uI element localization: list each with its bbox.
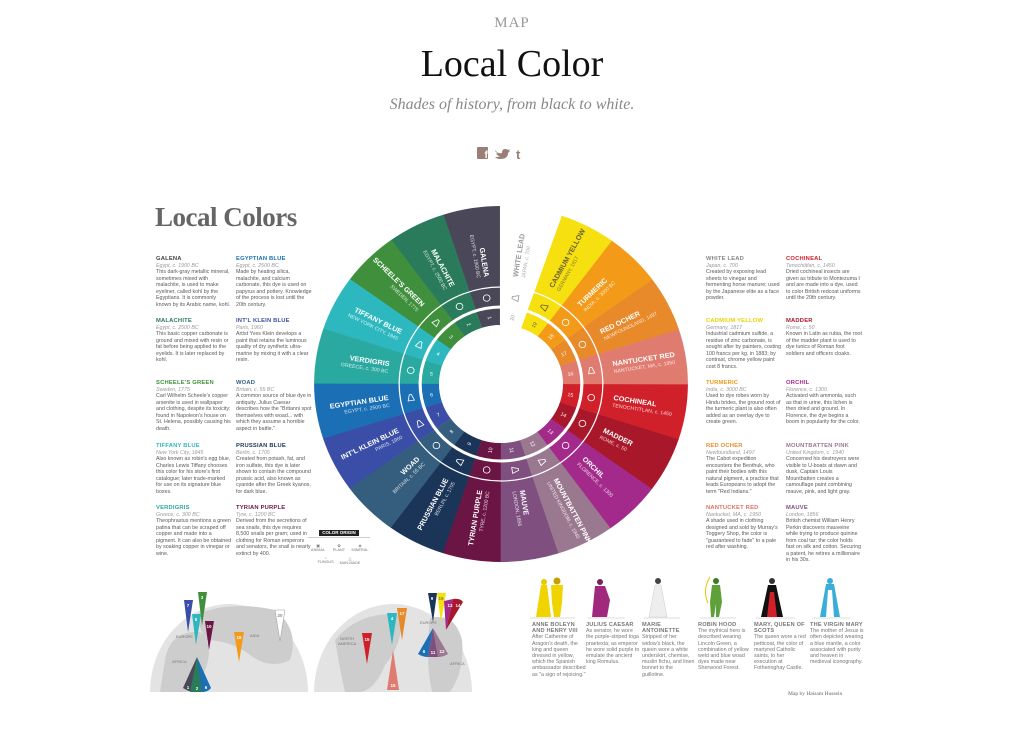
wheel segments	[327, 218, 675, 550]
segment labels: EGYPT, c. 1900 BC	[468, 234, 481, 279]
text column: right 1: Newfoundland, 1497	[706, 450, 755, 456]
text column: right 2: ORCHIL	[786, 380, 809, 386]
text column: left 1: Also known as robin's egg blue, Charles Lewis Tiffany chooses this color for his store's first catalogue; later trade-marked for use on its signature blue boxes.	[156, 456, 230, 494]
segment labels: NANTUCKET RED	[612, 351, 675, 368]
segment labels: JAPAN, c. 700	[521, 246, 532, 279]
segment labels: BERLIN, c. 1705	[434, 481, 457, 517]
segment labels: NEWFOUNDLAND, 1497	[603, 311, 659, 342]
text column: left 1: VERDIGRIS	[156, 505, 190, 511]
text column: right 2: British chemist William Henry Perkin discovers mauveine while trying to produce quinine from coal tar; the color holds fast on silk and cotton. Securing a patent, he retires a millionaire in his 30s.	[786, 518, 861, 563]
text column: left 1: Sweden, 1775	[156, 386, 190, 392]
text column: left 1: Egypt, c. 1900 BC	[156, 262, 199, 268]
segment labels: 5	[429, 371, 433, 378]
segment labels: EGYPT, c. 2500 BC	[421, 250, 448, 292]
segment labels: NANTUCKET, MA, c. 1950	[613, 360, 676, 375]
figure: mary queen of scots	[761, 578, 783, 617]
text column: left 2: A common source of blue dye in antiquity. Julius Caesar describes how the "Britanni spot themselves with woad... with which they assume a horrible aspect in battle."	[236, 393, 312, 432]
segment labels: PRUSSIAN BLUE	[416, 477, 451, 531]
text column: right 1: CADMIUM YELLOW	[706, 318, 763, 324]
figure: virgin mary	[820, 578, 840, 617]
segment labels: 11	[507, 447, 514, 453]
segment labels: 6	[430, 392, 434, 399]
segment labels: TYRIAN PURPLE	[467, 489, 484, 546]
text column: left 2: Derived from the secretions of sea snails, this dye requires 8,500 snails per gram; used in clothing for Roman emperors and senators, the snail is nearly extinct by 400.	[236, 518, 310, 556]
segment labels: MALACHITE	[429, 248, 456, 288]
text column: right 1: A shade used in clothing designed and sold by Murray's Toggery Shop, the color is "guaranteed to fade" to a pale red after washing.	[706, 518, 778, 550]
text column: right 1: TURMERIC	[706, 380, 738, 386]
text column: right 1: India, c. 3000 BC	[706, 386, 747, 392]
segment labels: CADMIUM YELLOW	[548, 227, 587, 289]
text column: right 2: Activated with ammonia, such as that in urine, this lichen is then dried and ground. In Florence, the dye begins a boom in popularity for the color.	[786, 393, 860, 425]
map: old world: 6	[205, 685, 208, 690]
text column: right 2: London, 1856	[786, 512, 818, 518]
segment labels: EGYPTIAN BLUE	[329, 394, 389, 411]
map: atlantic: EUROPE	[420, 620, 437, 625]
legend: color origin: MAN-MADE	[340, 561, 360, 565]
text column: left 2: Egypt, c. 2500 BC	[236, 262, 279, 268]
map: old world: 2	[196, 686, 199, 691]
text column: left 1: New York City, 1845	[156, 450, 204, 456]
segment labels: PARIS, 1960	[374, 435, 404, 453]
segment labels: TENOCHTITLAN, c. 1450	[612, 403, 672, 418]
text column: left 1: This dark-gray metallic mineral, sometimes mixed with malachite, is used to make eyeliner, called kohl by the Egyptians. It is commonly known by its Arabic name, kohl.	[156, 269, 230, 308]
text column: right 1: The Cabot expedition encounters the Beothuk, who paint their bodies with this natural pigment, a practice that leads Europeans to adopt the term "Red Indians."	[706, 456, 779, 494]
segment labels: 3	[447, 334, 454, 341]
legend: color origin: ▣	[316, 544, 320, 548]
caption: robin hood: ROBIN HOOD	[698, 622, 736, 628]
figure: anne boleyn and henry viii	[536, 578, 563, 617]
text column: left 2: Paris, 1960	[236, 324, 263, 330]
text column: right 2: COCHINEAL	[786, 256, 822, 262]
segment labels: ROME, c. 50	[598, 435, 628, 453]
map: old world: 7	[187, 603, 190, 608]
text column: right 2: Concerned his destroyers were visible to U-boats at dawn and dusk, Captain Louis Mountbatten creates a camouflage paint combining mauve, pink, and light gray.	[786, 456, 859, 494]
text column: left 2: TYRIAN PURPLE	[236, 505, 285, 511]
credit: Map by Haisam Hussein	[788, 691, 842, 697]
text column: right 1: RED OCHER	[706, 443, 743, 449]
text column: left 1	[156, 256, 231, 556]
segment labels	[329, 227, 677, 549]
segment labels: 18	[547, 333, 556, 341]
text column: left 1: SCHEELE'S GREEN	[156, 380, 214, 386]
text column: right 1: WHITE LEAD	[706, 256, 744, 262]
caption: mary queen of scots: MARY, QUEEN OF SCOTS	[754, 622, 805, 634]
map: atlantic: 11	[431, 650, 436, 655]
text column: right 1: NANTUCKET RED	[706, 505, 759, 511]
caption: julius caesar: JULIUS CAESAR	[586, 622, 634, 628]
map: old world: 10	[206, 624, 212, 629]
segment labels: INT'L KLEIN BLUE	[340, 427, 401, 462]
map: old world: ASIA	[250, 633, 259, 638]
map: old world: 20	[277, 613, 283, 618]
segment labels: MAUVE	[518, 490, 530, 516]
caption: anne boleyn: After Catherine of Aragon's death, the king and queen dressed in yellow, which the Spanish ambassador described as "a sign of rejoicing."	[532, 634, 586, 678]
segment labels: 13	[546, 428, 554, 436]
map: old world: EUROPE	[176, 634, 193, 639]
map: old world: 1	[187, 685, 190, 690]
text column: left 1: MALACHITE	[156, 318, 192, 324]
segment labels: GERMANY, 1817	[556, 256, 581, 292]
text column: right 2: MAUVE	[786, 505, 808, 511]
segment labels: TIFFANY BLUE	[353, 306, 403, 336]
caption: robin hood: The mythical hero is described wearing Lincoln Green, a combination of yellow weld and blue woad dyes made near Sherwood Forest.	[698, 628, 749, 671]
legend: color origin: PLANT	[333, 548, 345, 552]
segment labels: LONDON, 1856	[510, 491, 522, 527]
segment labels: BRITAIN, c. 55 BC	[392, 462, 427, 495]
segment labels: 8	[449, 429, 455, 435]
segment labels: WOAD	[399, 456, 422, 477]
caption: virgin mary: THE VIRGIN MARY	[810, 622, 863, 628]
text column: right 1: Germany, 1817	[706, 324, 742, 330]
segment labels: NEW YORK CITY, 1845	[347, 313, 399, 342]
map: atlantic: AMERICA	[338, 641, 357, 646]
segment labels: 17	[560, 351, 568, 358]
map: atlantic: 4	[391, 616, 394, 621]
text column: right 1	[706, 256, 781, 550]
figure: julius caesar	[592, 579, 610, 617]
map: atlantic: 17	[399, 611, 405, 616]
segment labels: 10	[488, 447, 495, 454]
segment labels: TURMERIC	[576, 277, 609, 308]
segment labels: 15	[567, 392, 574, 399]
segment labels: SWEDEN, 1775	[388, 284, 419, 313]
caption: marie antoinette: MARIE ANTOINETTE	[642, 622, 680, 634]
segment labels: RED OCHER	[599, 309, 642, 336]
map: atlantic: 9	[431, 596, 434, 601]
text column: left 1: GALENA	[156, 256, 182, 262]
text column: right 1: Created by exposing lead sheets to vinegar and fermenting horse manure; used by the Japanese elite as a face powder.	[706, 269, 780, 301]
text column: left 2	[236, 256, 312, 556]
text column: right 1: Industrial cadmium sulfide, a residue of zinc carbonate, is sought after by painters, costing 100 francs per kg. in 1883; by contrast, chrome yellow paint cost 8 francs.	[706, 331, 781, 370]
map: atlantic: 16	[390, 683, 396, 688]
map: atlantic: 13	[447, 603, 453, 608]
social icons: f	[484, 150, 488, 161]
text column: left 2: Made by heating silica, malachite, and calcium carbonate, this dye is used on papyrus and pottery. Knowledge of the process is lost until the 20th century.	[236, 269, 312, 308]
kicker: MAP	[494, 15, 530, 31]
text column: right 2: MOUNTBATTEN PINK	[786, 443, 849, 449]
section heading: Local Colors	[155, 202, 297, 232]
figure: marie antoinette	[649, 578, 667, 617]
segment labels: FLORENCE, c. 1300	[575, 462, 614, 499]
map: atlantic: 14	[455, 603, 461, 608]
legend: color origin	[308, 530, 370, 565]
text column: right 1: Used to dye robes worn by Hindu brides, the ground root of the turmeric plant is also often added as an overlay dye to create green.	[706, 393, 780, 425]
legend: color origin: ANIMAL	[311, 548, 325, 552]
segment labels: INDIA, c. 3000 BC	[583, 280, 618, 313]
map: atlantic: 15	[364, 637, 370, 642]
text column: left 1: TIFFANY BLUE	[156, 443, 200, 449]
map: old world	[150, 592, 308, 692]
text column: left 2: PRUSSIAN BLUE	[236, 443, 286, 449]
segment labels: TYRE, c. 1200 BC	[479, 491, 492, 532]
segment labels: ORCHIL	[580, 456, 607, 480]
title: Local Color	[421, 43, 603, 85]
subtitle: Shades of history, from black to white.	[390, 96, 634, 113]
map: atlantic	[314, 593, 472, 692]
segment labels: 16	[567, 371, 574, 378]
segment labels: 19	[531, 321, 539, 329]
text column: left 2: Berlin, c. 1705	[236, 450, 270, 456]
text column: left 2: EGYPTIAN BLUE	[236, 256, 286, 262]
figures row	[530, 576, 850, 618]
text column: left 2: Created from potash, fat, and iron sulfate, this dye is later shown to contain the compound prussic acid, also known as cyanide after the Greek kyanos, for dark blue.	[236, 456, 311, 494]
segment labels: 1	[486, 316, 492, 320]
segment labels: GALENA	[477, 247, 490, 277]
segment labels: 12	[528, 440, 536, 448]
map: old world: AFRICA	[172, 659, 187, 664]
text column: left 2: Britain, c. 55 BC	[236, 386, 274, 392]
legend: color origin: △	[349, 557, 351, 561]
map: atlantic: 19	[438, 596, 444, 601]
text column: right 2: Florence, c. 1300	[786, 386, 827, 392]
segment labels: UNITED KINGDOM, c. 1940	[545, 481, 581, 540]
caption: anne boleyn: ANNE BOLEYN AND HENRY VIII	[532, 622, 578, 634]
segment labels: 14	[559, 411, 567, 419]
segment labels: GREECE, c. 300 BC	[340, 362, 389, 375]
text column: right 2: Known in Latin as rubia, the root of the madder plant is used to dye tunics of Roman foot soldiers and officers cloaks.	[786, 331, 862, 356]
segment labels: EGYPT, c. 2500 BC	[344, 403, 391, 416]
segment labels: 4	[435, 351, 441, 358]
text column: right 2: Dried cochineal insects are given as tribute to Montezuma I and are made into a dye, used to color British redcoat uniforms until the 20th century.	[786, 269, 860, 301]
segment labels: WHITE LEAD	[512, 233, 527, 277]
legend: color origin: MINERAL	[352, 548, 368, 552]
segment labels: 7	[436, 412, 442, 419]
social icons	[477, 147, 521, 161]
legend: color origin: FUNGUS	[318, 560, 334, 564]
caption: virgin mary: The mother of Jesus is often depicted wearing a blue mantle, a color associated with purity and heaven in medieval iconography.	[810, 628, 864, 665]
figure: robin hood	[705, 577, 722, 617]
segment labels: 20	[510, 315, 517, 321]
caption: marie antoinette: Stripped of her widow's black, the queen wore a white underskirt, chemise, muslin fichu, and linen bonnet to the guillotine.	[642, 634, 694, 678]
map: atlantic: AFRICA	[450, 661, 465, 666]
text column: left 2: WOAD	[236, 380, 255, 386]
text column: right 2: MADDER	[786, 318, 813, 324]
text column: left 1: This basic copper carbonate is ground and mixed with resin or fat before being applied to the eyelids. It is later replaced by kohl.	[156, 331, 228, 363]
text column: left 1: Greece, c. 300 BC	[156, 512, 200, 518]
text column: right 2: United Kingdom, c. 1940	[786, 450, 844, 456]
segment labels: SCHEELE'S GREEN	[371, 256, 426, 308]
segment labels: 2	[465, 322, 472, 327]
map: atlantic: NORTH	[340, 636, 354, 641]
text column: left 1: Carl Wilhelm Scheele's copper arsenite is used in wallpaper and clothing, despite its toxicity; found in Napoleon's house on St. Helena, possibly causing his death.	[156, 393, 231, 432]
map: old world: 18	[236, 635, 242, 640]
text column: right 2: Tenochtitlan, c. 1450	[786, 262, 835, 268]
text column: left 2: Tyre, c. 1200 BC	[236, 512, 275, 518]
legend: color origin: COLOR ORIGIN	[322, 530, 356, 535]
legend: color origin: ◈	[359, 544, 361, 548]
text column: left 2: Artist Yves Klein develops a paint that retains the luminous quality of dry synthetic ultra-marine by mixing it with a clear resin.	[236, 331, 308, 363]
text column: left 2: INT'L KLEIN BLUE	[236, 318, 290, 324]
segment labels: MADDER	[602, 427, 635, 448]
map: old world: 3	[201, 595, 204, 600]
legend: color origin: ⌂	[324, 556, 327, 560]
segment labels: 9	[467, 441, 473, 447]
ring lines	[399, 202, 603, 481]
map: atlantic: 6	[423, 649, 426, 654]
segment labels: COCHINEAL	[613, 394, 658, 408]
map: atlantic: 12	[439, 649, 445, 654]
text column: right 1: Nantucket, MA, c. 1950	[706, 512, 761, 518]
text column: left 1: Egypt, c. 2500 BC	[156, 324, 199, 330]
legend: color origin: ✿	[337, 544, 341, 548]
segment labels: VERDIGRIS	[349, 354, 390, 368]
segment labels: MOUNTBATTEN PINK	[552, 477, 594, 546]
map: old world: 5	[195, 617, 198, 622]
text column: left 1: Theophrastus mentions a green patina that can be scraped off copper and made into a pigment. It can also be obtained by soaking copper in vinegar or wine.	[156, 518, 231, 556]
text column: right 2	[786, 256, 862, 563]
text column: right 1: Japan, c. 700	[706, 262, 738, 268]
caption: mary queen of scots: The queen wore a red petticoat, the color of martyred Catholic saints, to her execution at Fotheringhay Castle.	[754, 634, 806, 671]
text column: right 2: Rome, c. 50	[786, 324, 815, 330]
caption: julius caesar: As senator, he wore the purple-striped toga praetexta; as emperor he wore solid purple to emulate the ancient king Romulus.	[586, 628, 639, 665]
